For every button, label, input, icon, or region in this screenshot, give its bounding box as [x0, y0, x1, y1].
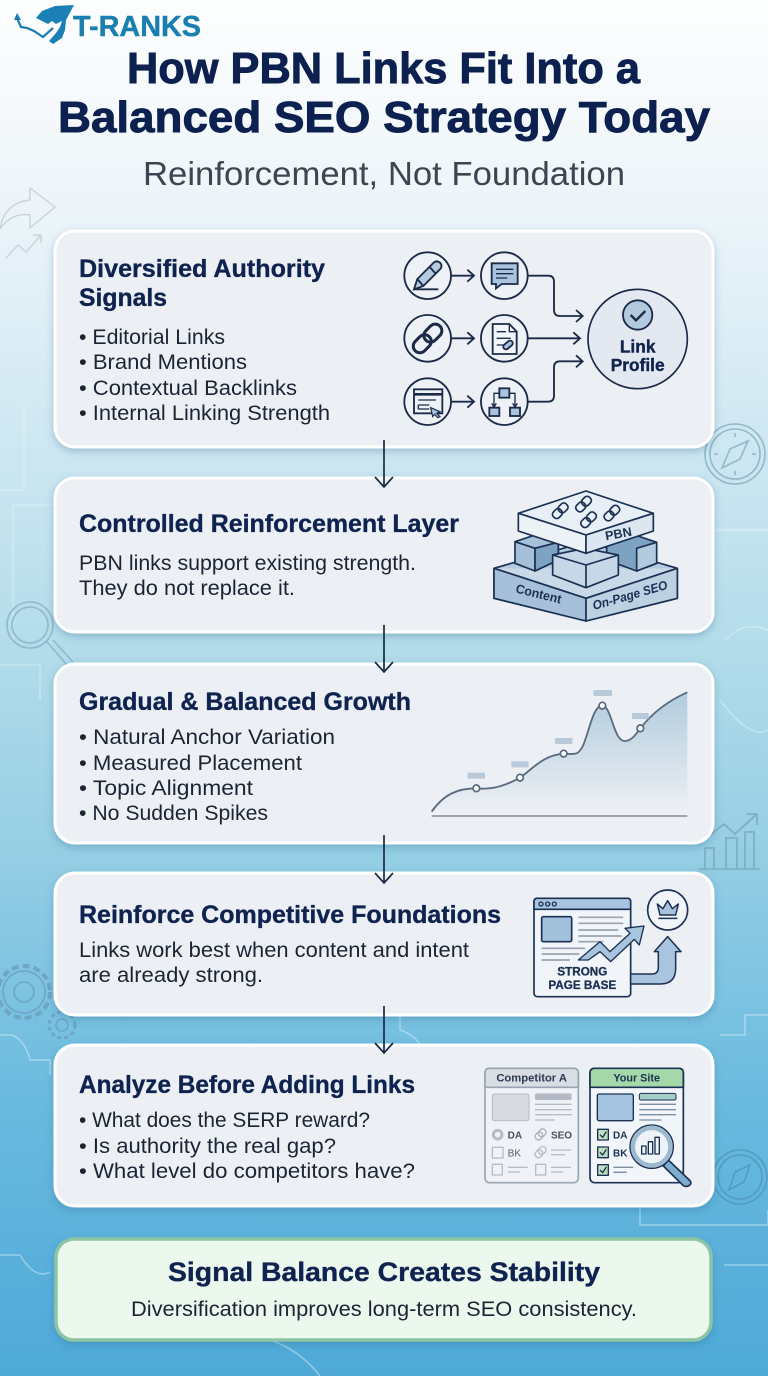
card: your site: Your Site — [613, 1073, 660, 1085]
bullet list: questions: • Is authority the real gap? — [79, 1134, 336, 1158]
bullet list: growth — [79, 725, 335, 825]
text: pbn support: PBN links support existing strength. — [79, 551, 416, 575]
bullet list: signals: • Contextual Backlinks — [79, 376, 297, 400]
icon: gears decoration — [0, 966, 75, 1038]
heading: diversified authority signals — [79, 255, 325, 312]
card: competitor A: DA — [508, 1130, 522, 1141]
icon: compass decoration bottom — [713, 1150, 767, 1204]
diagram: strong page base — [534, 890, 688, 997]
diagram: strong page base: PAGE BASE — [548, 979, 616, 992]
bullet list: questions: • What level do competitors have? — [79, 1159, 415, 1183]
title — [58, 44, 711, 142]
bullet list: signals: • Internal Linking Strength — [79, 401, 330, 425]
diagram: strong page base: STRONG — [557, 966, 607, 979]
heading: controlled reinforcement layer: Controlled Reinforcement Layer — [79, 510, 459, 538]
heading: signal balance: Signal Balance Creates Stability — [168, 1257, 600, 1287]
text: pbn support: They do not replace it. — [79, 576, 295, 600]
diagram: link profile flow — [404, 252, 687, 425]
heading: reinforce foundations: Reinforce Competitive Foundations — [79, 901, 501, 929]
card: competitor A: Competitor A — [496, 1073, 567, 1085]
text: links work best: Links work best when content and intent — [79, 938, 469, 962]
arrow: step 3 to 4 — [375, 835, 393, 883]
icon: bar chart decoration — [698, 814, 760, 869]
diagram: layered pbn stack: On-Page SEO — [591, 578, 669, 613]
heading: analyze: Analyze Before Adding Links — [79, 1071, 415, 1099]
arrow: step 1 to 2 — [375, 440, 393, 487]
heading: diversified authority signals: Signals — [79, 284, 167, 312]
card: your site — [590, 1068, 691, 1186]
bullet list: growth: • No Sudden Spikes — [79, 801, 268, 825]
bullet list: signals: • Brand Mentions — [79, 350, 247, 374]
diagram: layered pbn stack — [494, 491, 677, 621]
icon: magnifier decoration — [7, 602, 73, 666]
panel: signal balance callout — [56, 1239, 711, 1340]
diagram: link profile flow: Profile — [611, 355, 665, 375]
diagram: link profile flow: Link — [620, 336, 656, 356]
bullet list: growth: • Topic Alignment — [79, 776, 253, 800]
card: competitor A: SEO — [551, 1130, 572, 1141]
title: Balanced SEO Strategy Today — [58, 93, 711, 142]
bullet list: signals — [79, 325, 330, 425]
panel: gradual and balanced growth — [55, 664, 713, 843]
card: competitor A — [485, 1068, 578, 1183]
arrow: step 2 to 3 — [375, 625, 393, 672]
logo — [14, 5, 201, 44]
chart: growth curve — [432, 690, 687, 816]
card: your site: BK — [613, 1148, 628, 1159]
logo: T-RANKS — [73, 11, 201, 43]
card: your site: DA — [613, 1130, 627, 1141]
subtitle: Reinforcement, Not Foundation — [143, 155, 625, 192]
bullet list: questions: • What does the SERP reward? — [79, 1108, 370, 1132]
diagram: layered pbn stack: Content — [514, 582, 564, 607]
panel: analyze before adding links — [55, 1045, 713, 1206]
bullet list: signals: • Editorial Links — [79, 325, 225, 349]
bullet list: growth: • Measured Placement — [79, 751, 302, 775]
arrow: step 4 to 5 — [375, 1006, 393, 1053]
bullet list: growth: • Natural Anchor Variation — [79, 725, 335, 749]
diagram: competitor comparison — [485, 1068, 691, 1186]
panel: controlled reinforcement layer — [55, 478, 713, 632]
heading: gradual growth: Gradual & Balanced Growth — [79, 688, 411, 716]
panel: diversified authority signals — [55, 231, 713, 447]
title: How PBN Links Fit Into a — [127, 44, 641, 93]
text: links work best: are already strong. — [79, 963, 263, 987]
icon: share arrow decoration — [0, 188, 55, 258]
panel: reinforce competitive foundations — [55, 873, 713, 1015]
text: diversification: Diversification improves long-term SEO consistency. — [131, 1297, 637, 1321]
card: competitor A: BK — [508, 1148, 521, 1159]
text: links work best — [79, 938, 469, 987]
diagram: layered pbn stack: PBN — [604, 525, 633, 543]
text: pbn support — [79, 551, 416, 600]
bullet list: questions — [79, 1108, 415, 1183]
icon: compass decoration top — [705, 424, 765, 484]
heading: diversified authority signals: Diversified Authority — [79, 255, 325, 283]
